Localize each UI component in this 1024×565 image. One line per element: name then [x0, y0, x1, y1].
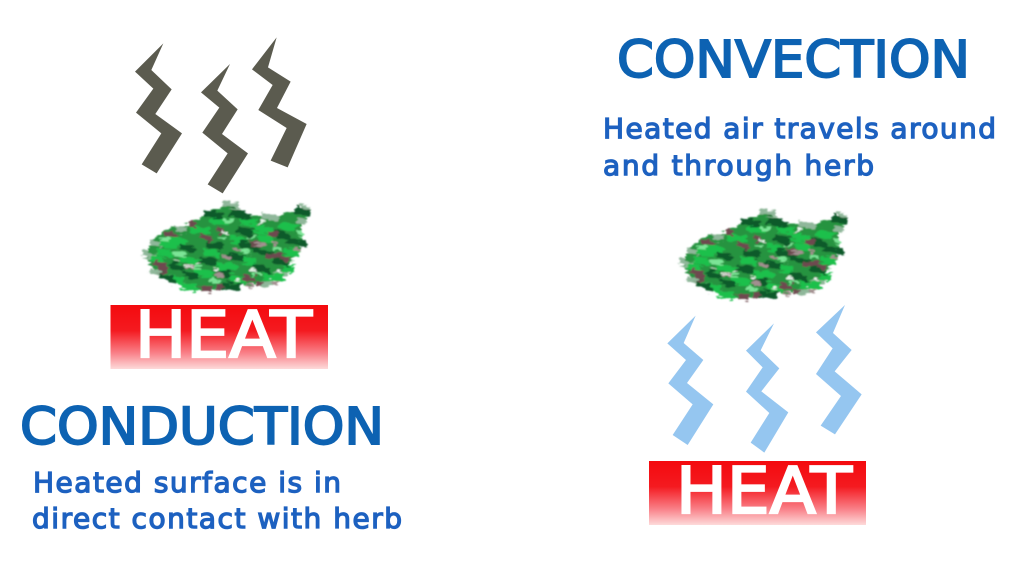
text: conduction description [32, 466, 402, 535]
heading: conduction: CONDUCTION [20, 398, 384, 457]
icon: dark heat waves rising from herb [135, 37, 307, 193]
heading: convection: CONVECTION [617, 31, 970, 90]
heat block: HEAT [676, 455, 853, 529]
panel: conduction [20, 37, 402, 535]
panel: convection [603, 31, 996, 529]
heat block: HEAT [135, 299, 313, 373]
text: conduction description: direct contact with herb [32, 502, 402, 535]
icon: blue heated air waves [667, 305, 862, 453]
text: convection description [603, 112, 996, 182]
text: convection description: Heated air travels around [603, 112, 996, 145]
icon: herb on heated surface [143, 204, 310, 290]
text: convection description: and through herb [603, 149, 874, 182]
text: conduction description: Heated surface is in [33, 466, 341, 499]
icon: herb above heated air [680, 212, 847, 298]
